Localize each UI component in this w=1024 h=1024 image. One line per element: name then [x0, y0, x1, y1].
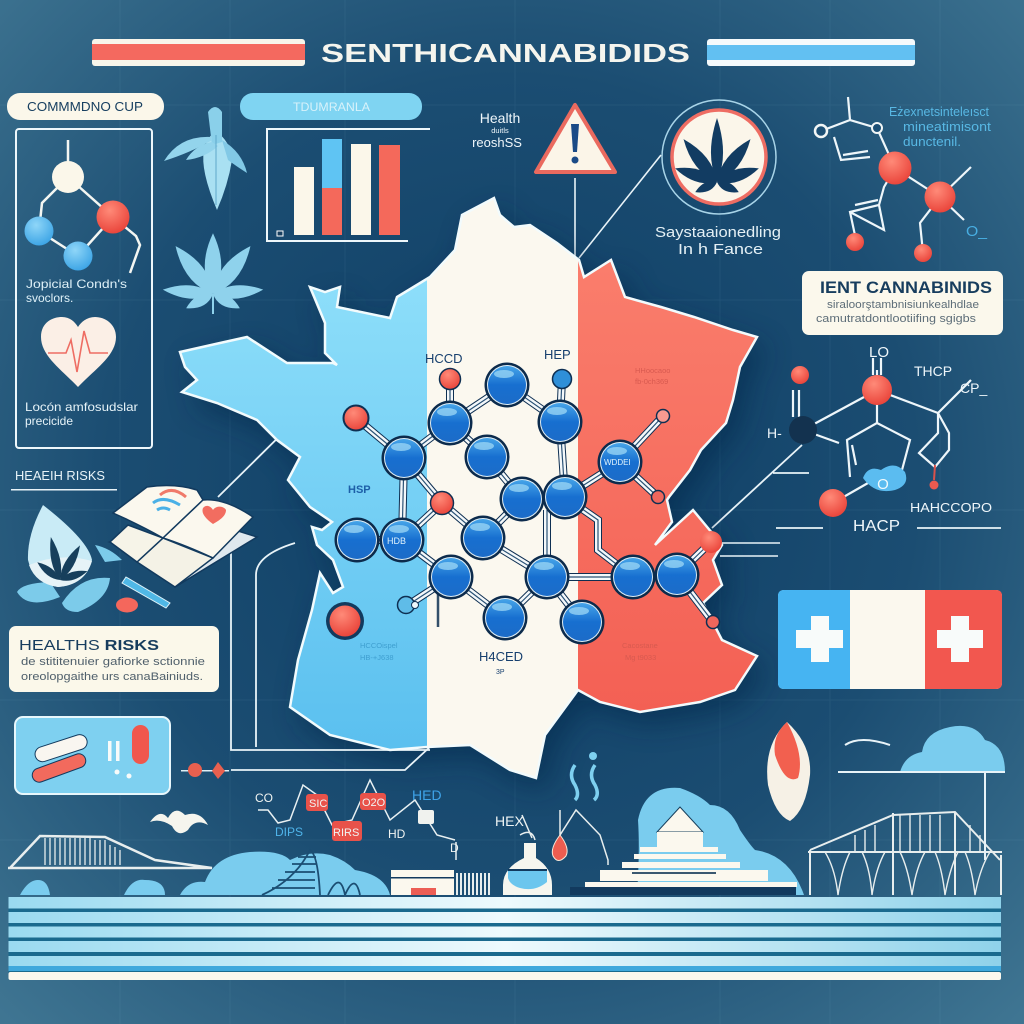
faint map labels: HCCOispel	[360, 641, 398, 650]
France caption: In h Fance	[678, 241, 763, 258]
faint map labels: fb-0ch369	[635, 377, 668, 386]
bonds	[356, 379, 713, 627]
France map	[170, 190, 768, 790]
panel: health risks: oreolopgaithe urs canaBainiuds.	[21, 671, 203, 683]
icon: water drop with leaf	[17, 505, 122, 612]
map shadow	[190, 210, 767, 790]
icon: top leaf	[164, 107, 247, 210]
right red leaf drop	[767, 722, 810, 821]
faint map labels: Cacostane	[622, 641, 658, 650]
icon: capsules	[30, 725, 149, 784]
lower right molecule: O	[877, 476, 889, 493]
faint map labels: HB-+J638	[360, 653, 394, 662]
chain molecule labels: SIC	[309, 798, 327, 810]
top right molecule: O_	[966, 223, 988, 240]
lower right molecule: CP_	[960, 380, 987, 396]
atom labels: HEP	[544, 347, 571, 362]
chain molecule labels: CO	[255, 791, 273, 805]
chain molecule labels: DIPS	[275, 825, 303, 839]
icon: open book	[110, 486, 257, 587]
connector lines left	[218, 418, 432, 770]
chain molecule labels: RIRS	[333, 827, 359, 839]
icon: cannabis leaf	[162, 233, 264, 314]
connectors right of map	[720, 543, 780, 556]
factory block	[391, 870, 489, 895]
common compounds pill	[7, 93, 164, 120]
panel: health risks: de stititenuier gafiorke sctionnie	[21, 656, 205, 668]
faint map labels: HHoocaoo	[635, 366, 670, 375]
health risks heading: HEAEIH RISKS	[15, 468, 105, 483]
icon: flask with vapour	[495, 752, 608, 895]
callout lines to the map	[575, 155, 661, 262]
icon: flask with vapour: HEX	[495, 813, 524, 829]
atom labels: 3P	[496, 669, 505, 676]
icon: hill ladder	[262, 850, 360, 895]
chain molecule labels: D	[450, 841, 459, 855]
molecule icon	[24, 140, 140, 273]
warning triangle icon	[536, 105, 615, 172]
atom inner labels: WDDEI	[604, 458, 631, 467]
chain molecule labels: HED	[412, 787, 442, 803]
lower right molecule: HAHCCOPO	[910, 500, 992, 515]
cloud with rule	[838, 726, 1005, 860]
right bridge	[808, 812, 1002, 895]
cardiovascular text: Locón amfosudslar	[25, 400, 138, 414]
top right blue note: Eżexnetsinteleısct	[889, 105, 990, 119]
small white cloud	[150, 811, 208, 833]
health risks note: Health	[480, 110, 520, 126]
health risks note: reoshSS	[472, 135, 522, 150]
panel: cannabinoids: camutratdontlootiifing sgigbs	[816, 313, 977, 325]
panel: cannabinoids: IENT CANNABINIDS	[820, 278, 992, 297]
treatment pill: TDUMRANLA	[293, 100, 370, 114]
title banner	[92, 38, 915, 68]
health risks note: duitls	[491, 126, 509, 135]
common compounds pill: COMMMDNO CUP	[27, 99, 143, 114]
panel: health risks: HEALTHS RISKS	[19, 637, 159, 654]
top right blue note: dunctenil.	[903, 135, 961, 149]
chain molecule labels: HD	[388, 827, 406, 841]
panel: cannabinoids: siraloorştambnisiunkealhdlae	[827, 299, 979, 311]
chain molecule labels	[255, 780, 459, 860]
lower right molecule	[712, 344, 1001, 535]
icon: banned cannabis circle	[662, 100, 776, 214]
bar chart	[267, 129, 430, 241]
atoms	[326, 362, 722, 644]
molecule on map	[326, 347, 722, 676]
icon: blue strip	[122, 577, 170, 608]
atom inner labels: HDB	[387, 536, 406, 546]
atom labels: HSP	[348, 484, 371, 496]
top right molecule	[815, 97, 988, 262]
lower right molecule: LO	[869, 344, 889, 361]
left bridge	[8, 836, 212, 868]
icon: small pill	[116, 598, 138, 612]
compound text: Jopicial Condn's	[26, 277, 127, 291]
red marker nodes	[181, 762, 229, 779]
compound text: svoclors.	[26, 291, 73, 305]
panel: cannabinoids	[802, 271, 1003, 335]
faint map labels: Mg t9033	[625, 653, 656, 662]
bottom stripes	[8, 897, 1001, 980]
treatment pill	[240, 93, 422, 120]
chain molecule labels: O2O	[362, 797, 386, 809]
panel: left compounds box	[16, 129, 152, 448]
lower right molecule: H-	[767, 425, 782, 441]
lower right molecule: HACP	[853, 518, 900, 535]
panel: health risks	[9, 626, 219, 692]
temple with cloud	[570, 788, 804, 895]
health risks heading	[11, 468, 117, 490]
flag with crosses	[778, 590, 1002, 689]
title banner: SENTHICANNABIDIDS	[321, 38, 690, 68]
France caption: Saystaaionedling	[655, 224, 781, 241]
skyline left clouds	[20, 852, 390, 895]
icon: heart with pulse	[41, 317, 116, 387]
cardiovascular text: precicide	[25, 414, 73, 428]
lower right molecule: THCP	[914, 363, 952, 379]
top right blue note: mineatimisont	[903, 120, 992, 134]
atom labels: H4CED	[479, 649, 523, 664]
panel: pills box	[15, 717, 170, 794]
atom labels: HCCD	[425, 351, 463, 366]
